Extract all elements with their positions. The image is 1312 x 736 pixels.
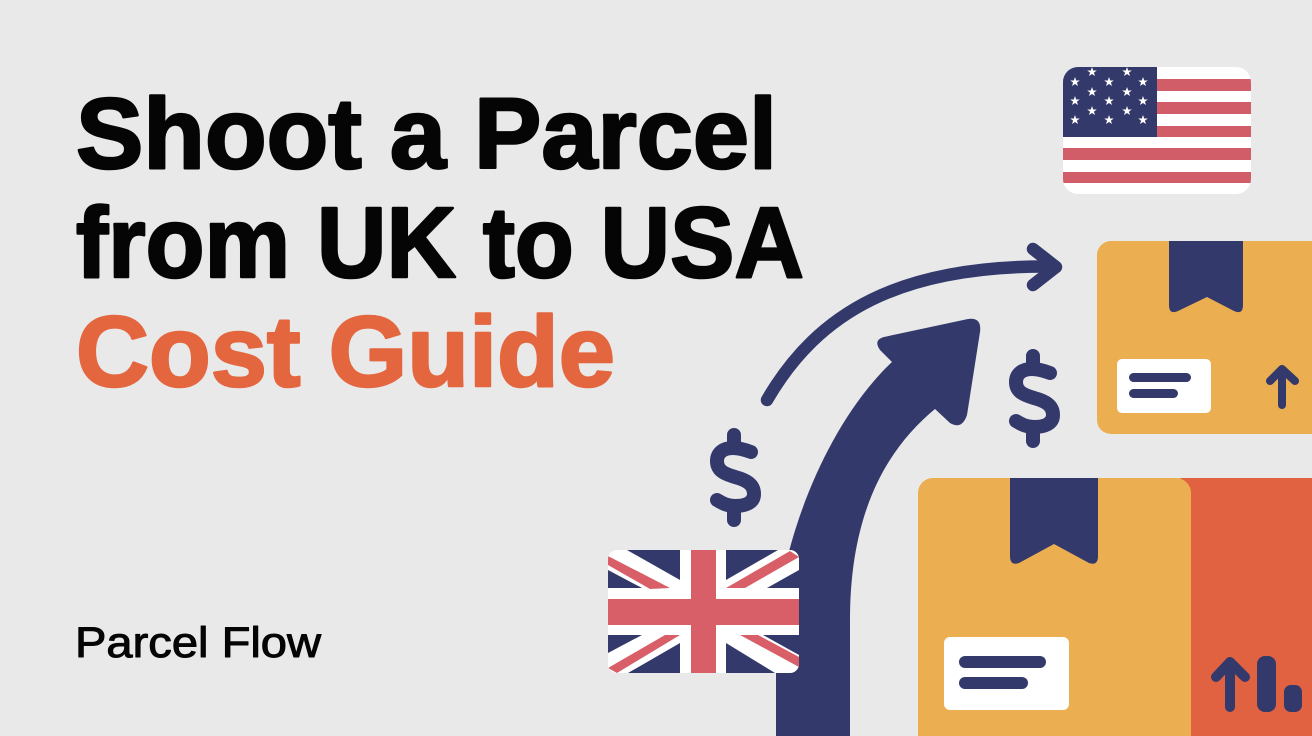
brand name: Parcel Flow — [75, 619, 322, 667]
icon: large parcel boxes — [918, 478, 1312, 736]
large box up arrow — [1216, 662, 1245, 707]
icon: UK flag — [608, 550, 799, 673]
small box label — [1117, 359, 1211, 413]
orange rear box — [1170, 478, 1312, 736]
small box ribbon — [1169, 241, 1243, 312]
short bar — [1284, 685, 1302, 712]
large box ribbon — [1010, 478, 1098, 564]
icon: dollar sign left — [717, 435, 754, 520]
small box up arrow — [1270, 369, 1295, 405]
icon: dollar sign right — [1016, 356, 1053, 441]
icon: small parcel box — [1097, 241, 1312, 434]
gold front box — [918, 478, 1191, 736]
title line: Cost Guide: Cost Guide — [76, 296, 615, 408]
icon: US flag — [1063, 67, 1251, 194]
title line: from UK to USA: from UK to USA — [76, 187, 804, 299]
arrow: large rising arrow — [776, 319, 980, 736]
title line: Shoot a Parcel: Shoot a Parcel — [76, 78, 777, 190]
title — [76, 78, 804, 408]
large box label — [944, 637, 1069, 710]
arrow: thin curved route arrow — [767, 249, 1056, 400]
tall bar — [1257, 656, 1276, 712]
